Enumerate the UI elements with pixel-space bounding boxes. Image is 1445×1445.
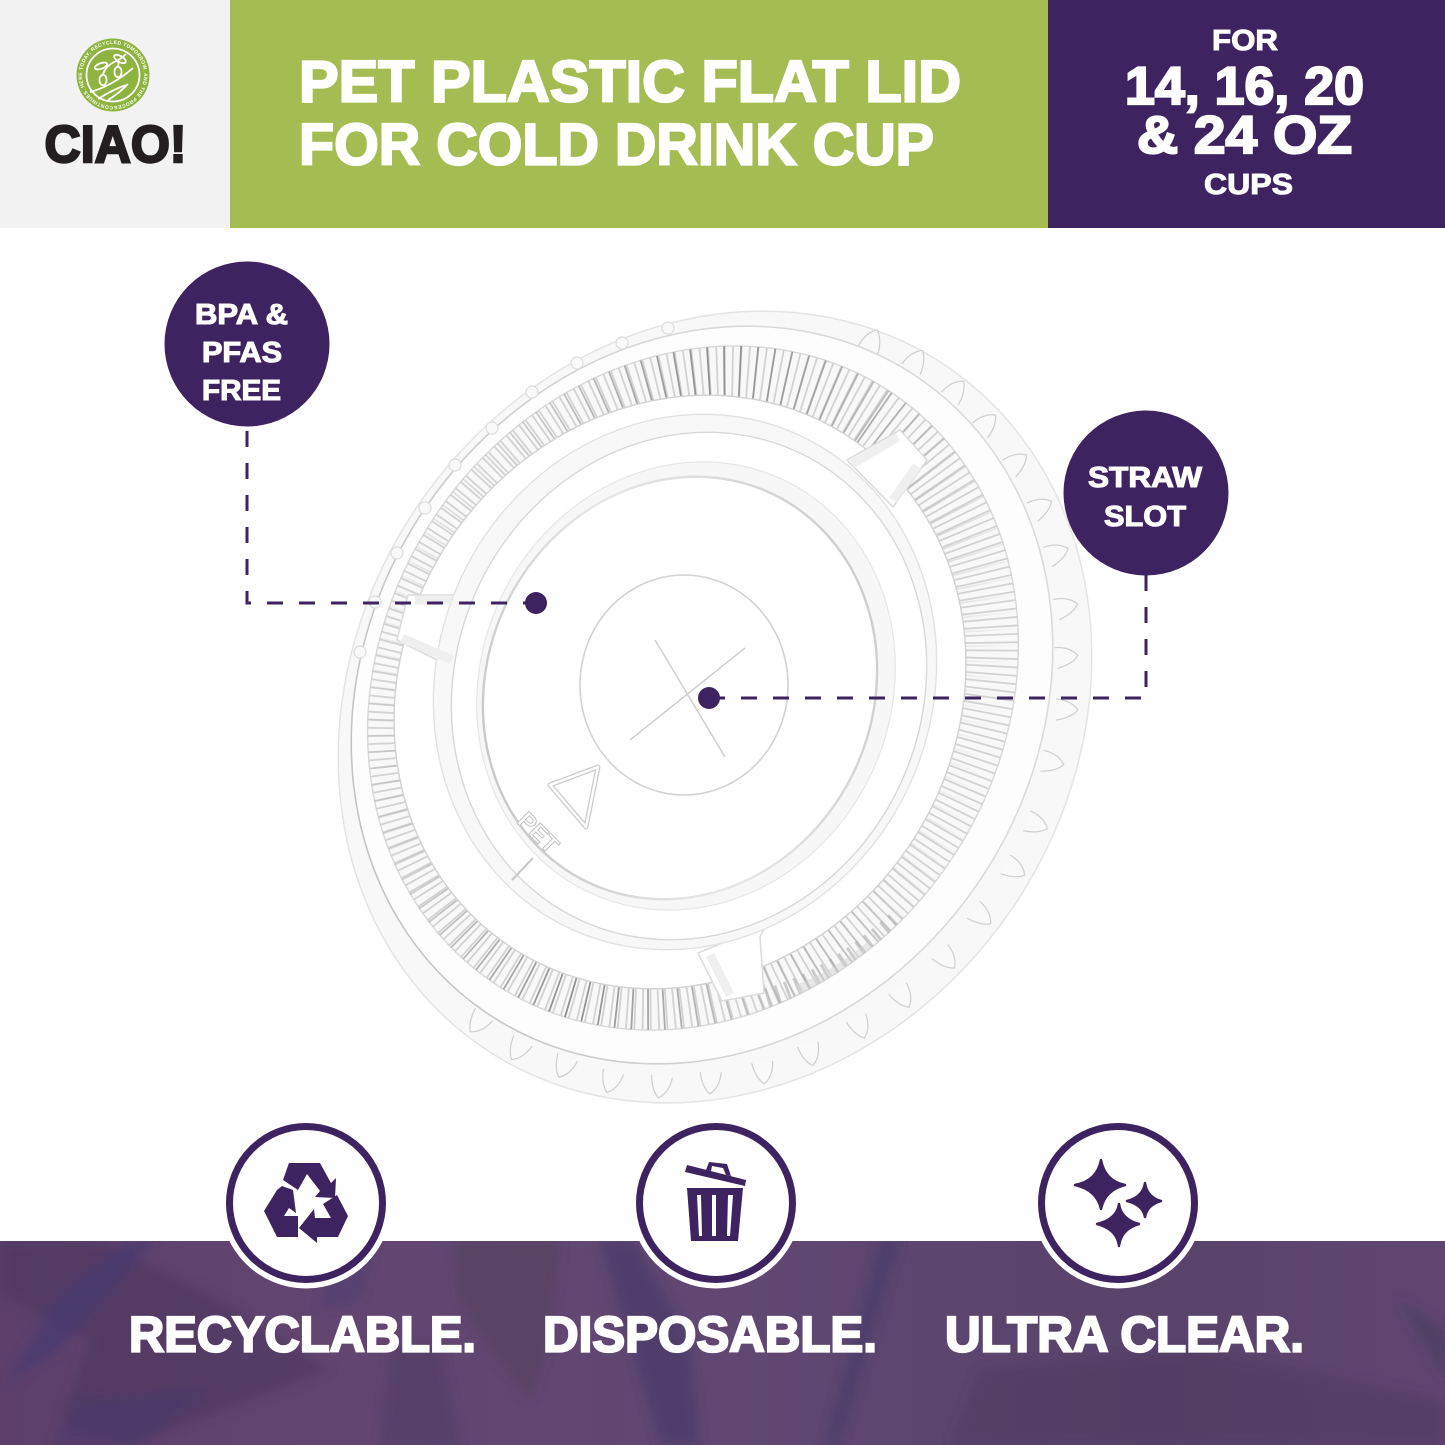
lid tab edge shading <box>402 437 917 995</box>
header: title panel <box>230 0 1048 228</box>
callout text <box>1088 462 1202 533</box>
lid PET recycling mark <box>512 767 598 880</box>
callout text: PFAS <box>202 337 282 369</box>
callout dot <box>698 687 720 709</box>
lid ribbed band <box>366 345 1020 1031</box>
feature label: RECYCLABLE. <box>129 1306 476 1362</box>
callout leader line <box>247 427 536 603</box>
callout text: FREE <box>202 375 281 407</box>
callout text: SLOT <box>1104 501 1187 533</box>
callout dot <box>525 592 547 614</box>
icon: sparkles <box>1032 1118 1204 1288</box>
title text <box>299 50 961 178</box>
feature: recyclable <box>129 1118 476 1362</box>
cup sizes text: CUPS <box>1204 169 1293 201</box>
feature label: ULTRA CLEAR. <box>945 1306 1304 1362</box>
header: logo panel <box>0 0 230 228</box>
cup sizes text: 14, 16, 20 <box>1125 57 1364 116</box>
title text: PET PLASTIC FLAT LID <box>299 50 961 114</box>
title text: FOR COLD DRINK CUP <box>299 112 934 178</box>
lid inner rings <box>346 331 1024 1033</box>
logo badge <box>76 38 150 112</box>
bottom band with leaf backdrop <box>0 1241 1445 1445</box>
callout bubble <box>1064 410 1228 576</box>
cup sizes text <box>1125 25 1364 201</box>
feature label: DISPOSABLE. <box>543 1306 877 1362</box>
callout: BPA and PFAS free <box>164 262 547 614</box>
icon: trash can <box>630 1118 802 1288</box>
lid PET recycling mark: PET <box>512 807 564 859</box>
cup sizes text: FOR <box>1212 25 1278 57</box>
feature: ultra clear <box>945 1118 1304 1362</box>
icon: recycling arrows <box>220 1118 392 1288</box>
callout bubble <box>164 262 330 426</box>
feature: disposable <box>543 1118 877 1362</box>
cup sizes text: & 24 OZ <box>1137 106 1352 165</box>
logo wordmark: CIAO! <box>44 116 186 174</box>
lid centre straw area <box>580 575 788 795</box>
lid outer rim with teeth <box>186 164 1244 1250</box>
lid tabs <box>397 430 927 1001</box>
callout leader line <box>709 575 1146 698</box>
header: cup sizes panel <box>1048 0 1445 228</box>
callout: straw slot <box>698 410 1228 709</box>
callout text: BPA & <box>195 299 288 331</box>
product: clear plastic lid <box>338 310 1092 1104</box>
callout text <box>195 299 288 407</box>
callout text: STRAW <box>1088 462 1202 494</box>
